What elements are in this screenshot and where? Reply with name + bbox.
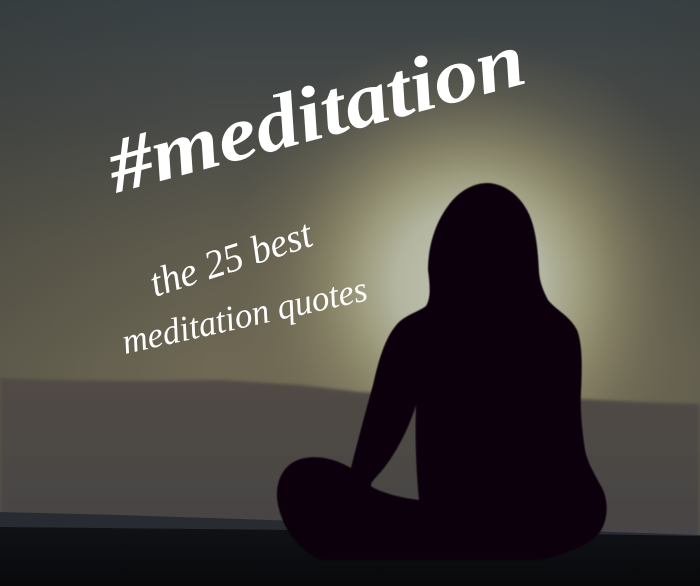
- water strip: [0, 512, 700, 550]
- title: #meditation: #meditation: [97, 15, 534, 210]
- foreground ground: [0, 527, 700, 586]
- subtitle line: meditation quotes: meditation quotes: [118, 269, 371, 362]
- distant mountains: [0, 378, 700, 540]
- silhouette of seated woman: [277, 183, 607, 560]
- sun glow: [0, 0, 700, 420]
- subtitle line: the 25 best: the 25 best: [144, 211, 318, 306]
